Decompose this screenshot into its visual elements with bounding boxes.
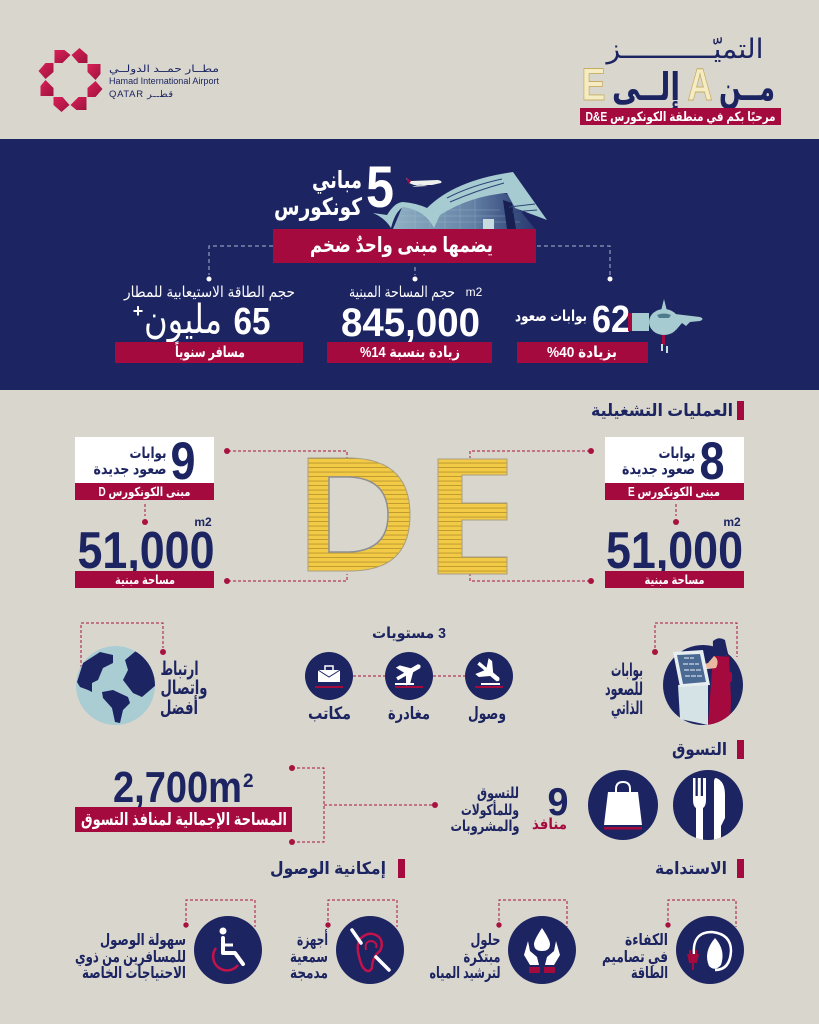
- card: concourse D: مبنى الكونكورس D: [98, 485, 190, 499]
- feature: hearing devices: [290, 900, 404, 984]
- stat: built area: زيادة بنسبة 14%: [360, 344, 460, 361]
- stat: passenger capacity: مسافر سنوياً: [175, 341, 245, 361]
- panel: accessibility: [75, 859, 405, 984]
- stat: 9 outlets: [532, 781, 568, 833]
- heading: sustainability: الاستدامة: [655, 859, 727, 878]
- stat: total retail area: 2,700m: [113, 763, 242, 812]
- card: concourse D: [75, 432, 214, 500]
- label: hearing devices: سمعية: [290, 949, 328, 966]
- label: hearing devices: أجهزة: [297, 929, 328, 949]
- stat: passenger capacity: [115, 284, 303, 363]
- card: concourse D: 9: [170, 432, 196, 491]
- label: water saving: لترشيد المياه: [430, 965, 500, 982]
- stat: passenger capacity: حجم الطاقة الاستيعابية للمطار: [123, 284, 295, 301]
- word: buildings: مباني: [312, 167, 362, 194]
- feature: better connectivity: [76, 623, 208, 725]
- icon: hands and water drop: [508, 916, 576, 984]
- label: energy efficiency: [602, 932, 668, 982]
- label: energy efficiency: الطاقة: [631, 965, 668, 982]
- icon: hearing loop: [336, 916, 404, 984]
- label: water saving: مبتكرة: [464, 949, 500, 966]
- label: energy efficiency: في تصاميم: [602, 949, 668, 967]
- stat: passenger capacity: مليون: [144, 298, 222, 343]
- logo: Hamad International Airport: [38, 48, 219, 112]
- label: better connectivity: ارتباط: [160, 659, 198, 680]
- heading: shopping: التسوق: [672, 740, 727, 760]
- label: self-boarding gates: للصعود: [605, 679, 643, 700]
- illustration: terminal building: [373, 172, 547, 230]
- level: departures: مغادرة: [388, 704, 430, 723]
- stat: built area: حجم المساحة المبنية: [349, 284, 455, 301]
- number 5: 5: [366, 155, 394, 220]
- stat: built area: m2: [466, 285, 483, 299]
- logo english name: Hamad International Airport: [109, 76, 219, 87]
- letter E: [438, 459, 507, 574]
- title line 1: التميّـــــــــــز: [604, 34, 764, 65]
- label: water saving: [430, 932, 500, 982]
- stat: passenger capacity: 65: [234, 301, 270, 343]
- title word: from: مــن: [719, 67, 775, 109]
- icon: globe: [76, 646, 156, 725]
- card: concourse E: [605, 432, 744, 500]
- stat: E built area: مساحة مبنية: [644, 573, 704, 587]
- logo qatar line: QATAR قطــر: [109, 89, 173, 100]
- label: better connectivity: أفضل: [160, 695, 198, 719]
- stat: D built area: مساحة مبنية: [115, 573, 175, 587]
- panel: shopping: [75, 740, 744, 845]
- card: concourse E: بوابات: [658, 445, 696, 462]
- stat: 9 outlets: 9: [548, 781, 568, 824]
- icon: star ring emblem: [38, 48, 102, 112]
- label: better connectivity: واتصال: [160, 678, 208, 699]
- icon: energy leaf plug: [676, 916, 744, 984]
- title letter E: E: [582, 59, 606, 110]
- connector lines: [142, 448, 679, 584]
- label: shopping and dining: وللمأكولات: [461, 800, 519, 819]
- heading: three levels: 3 مستويات: [372, 625, 446, 642]
- label: special needs access: [75, 932, 186, 982]
- level: arrivals: [465, 652, 513, 724]
- icon: wheelchair: [194, 916, 262, 984]
- panel: concourses overview: [0, 139, 819, 390]
- title word: to: إلــى: [612, 67, 680, 110]
- card: concourse E: 8: [700, 432, 724, 491]
- level: arrivals: وصول: [468, 704, 506, 724]
- label: hearing devices: مدمجة: [290, 965, 328, 982]
- card: concourse D: صعود جديدة: [94, 461, 166, 478]
- icon: small plane: [406, 177, 442, 187]
- stat: boarding gates: [515, 299, 648, 363]
- feature: energy efficiency: [602, 900, 744, 984]
- icon: fork and knife: [673, 770, 743, 841]
- feature: self-boarding gates: [605, 623, 743, 725]
- label: special needs access: للمسافرين من ذوي: [75, 949, 186, 967]
- stat: D built area: 51,000: [78, 522, 214, 580]
- feature: three levels: [305, 625, 513, 724]
- label: better connectivity: [160, 659, 208, 719]
- label: self-boarding gates: الذاتي: [611, 698, 643, 719]
- label: shopping and dining: والمشروبات: [450, 818, 520, 835]
- label: special needs access: سهولة الوصول: [100, 932, 186, 949]
- card: concourse E: صعود جديدة: [622, 461, 695, 478]
- panel: sustainability: [430, 859, 744, 984]
- label: hearing devices: [290, 929, 328, 982]
- logo arabic name: مطــار حمــد الدولــي: [109, 64, 219, 75]
- panel: header: [38, 34, 781, 125]
- label: energy efficiency: الكفاءة: [625, 932, 668, 949]
- label: self-boarding gates: [605, 660, 643, 719]
- title letter A: A: [688, 59, 712, 110]
- stat: boarding gates: 62: [592, 299, 630, 341]
- level: offices: مكاتب: [308, 704, 351, 723]
- title: [580, 34, 781, 125]
- stat: 9 outlets: منافذ: [532, 816, 567, 833]
- stat: total retail area: المساحة الإجمالية لمنافذ التسوق: [81, 810, 287, 830]
- word: concourses: كونكورس: [274, 194, 362, 221]
- level: departures: [385, 652, 433, 723]
- card: concourse E: مبنى الكونكورس E: [628, 485, 720, 499]
- label: shopping and dining: [450, 785, 520, 835]
- banner: one giant building: [273, 229, 536, 263]
- feature: water saving: [430, 900, 576, 984]
- stat: total retail area: [75, 763, 292, 832]
- stat: passenger capacity: +: [133, 301, 143, 321]
- label: self-boarding gates: بوابات: [611, 660, 643, 681]
- label: shopping and dining: للتسوق: [477, 785, 519, 802]
- stat: total retail area: 2: [243, 771, 254, 792]
- stat: E built area: 51,000: [606, 522, 743, 580]
- connector lines: [289, 765, 438, 845]
- stat: D built area: m2: [194, 515, 212, 529]
- stat: boarding gates: بزيادة 40%: [547, 344, 617, 361]
- icon: self-service kiosk: [663, 638, 743, 725]
- stat: built area: 845,000: [341, 301, 480, 345]
- panel: operations: [75, 401, 744, 725]
- stat: D built area: [75, 515, 214, 588]
- label: water saving: حلول: [470, 932, 500, 949]
- banner: one giant building: يضمها مبنى واحدٌ ضخم: [310, 234, 493, 257]
- heading: accessibility: إمكانية الوصول: [270, 859, 386, 879]
- letter D: [308, 458, 410, 571]
- icon: plane at jet bridge: [628, 299, 702, 353]
- stat: E built area: m2: [723, 515, 741, 529]
- card: concourse D: بوابات: [130, 445, 166, 462]
- stat: built area: [327, 284, 492, 363]
- connector lines: [206, 246, 612, 282]
- level: offices: [305, 652, 353, 723]
- icon: shopping bag: [588, 770, 658, 840]
- label: special needs access: الاحتياجات الخاصة: [82, 965, 186, 982]
- heading: operations: العمليات التشغيلية: [591, 401, 733, 420]
- stat: boarding gates: بوابات صعود: [515, 308, 587, 325]
- welcome banner: مرحبًا بكم في منطقة الكونكورس D&E: [585, 109, 776, 124]
- stat: 5 concourses: [274, 155, 394, 221]
- feature: special needs access: [75, 900, 262, 984]
